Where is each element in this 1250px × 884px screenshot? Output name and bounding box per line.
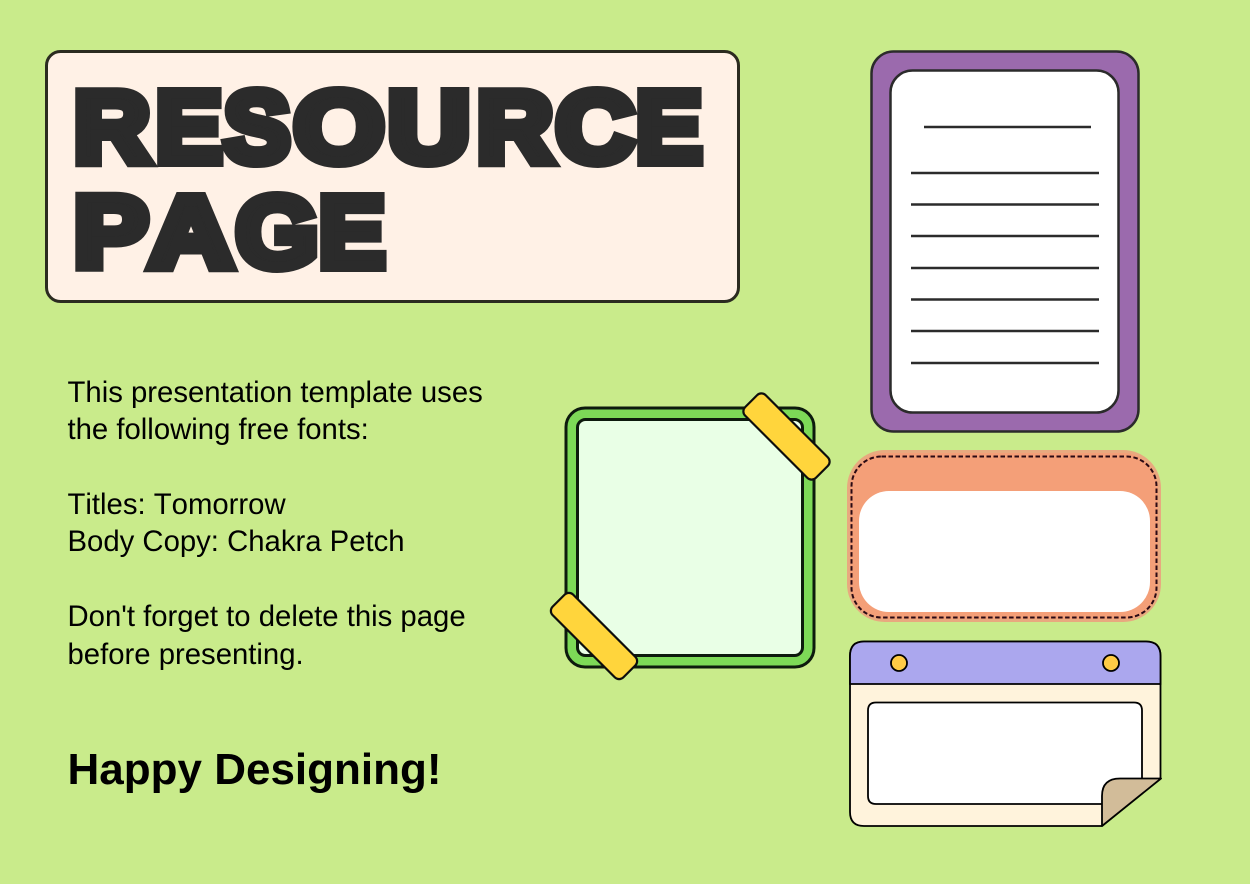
panel: green taped note bbox=[548, 391, 832, 682]
icon: top right tape bbox=[741, 391, 832, 482]
panel: salmon stitched card bbox=[847, 450, 1161, 622]
title: PAGE: E bbox=[319, 176, 385, 288]
body text block: before presenting. bbox=[68, 638, 304, 671]
icon: bottom left tape bbox=[548, 590, 640, 682]
body text block: This presentation template uses bbox=[68, 376, 483, 409]
title: RESOURCE: U bbox=[388, 72, 470, 184]
title: RESOURCE: R bbox=[477, 72, 553, 184]
title: PAGE bbox=[74, 176, 385, 288]
icon: right pin bbox=[1103, 655, 1119, 671]
icon: folded corner bbox=[1102, 778, 1161, 826]
title: RESOURCE bbox=[74, 72, 702, 184]
calendar header bbox=[850, 642, 1160, 684]
body text block: Body Copy: Chakra Petch bbox=[68, 525, 405, 558]
body text block: Don't forget to delete this page bbox=[68, 600, 466, 633]
title: RESOURCE: O bbox=[294, 72, 384, 184]
body text block bbox=[68, 376, 483, 671]
panel: purple lined note bbox=[872, 52, 1138, 432]
title panel bbox=[46, 52, 738, 302]
closing message: Happy Designing! bbox=[68, 745, 442, 794]
title: PAGE: G bbox=[236, 176, 318, 288]
body text block: Titles: Tomorrow bbox=[68, 488, 286, 521]
calendar inner panel bbox=[868, 702, 1142, 804]
title: RESOURCE: R bbox=[74, 72, 150, 184]
title: PAGE: P bbox=[74, 176, 148, 288]
panel: calendar note bbox=[850, 642, 1161, 826]
title: RESOURCE: S bbox=[224, 72, 290, 184]
title: RESOURCE: E bbox=[156, 72, 222, 184]
title: RESOURCE: C bbox=[556, 72, 634, 184]
body text block: the following free fonts: bbox=[68, 413, 369, 446]
icon: left pin bbox=[891, 655, 907, 671]
title: PAGE: A bbox=[149, 176, 233, 288]
title: RESOURCE: E bbox=[636, 72, 702, 184]
